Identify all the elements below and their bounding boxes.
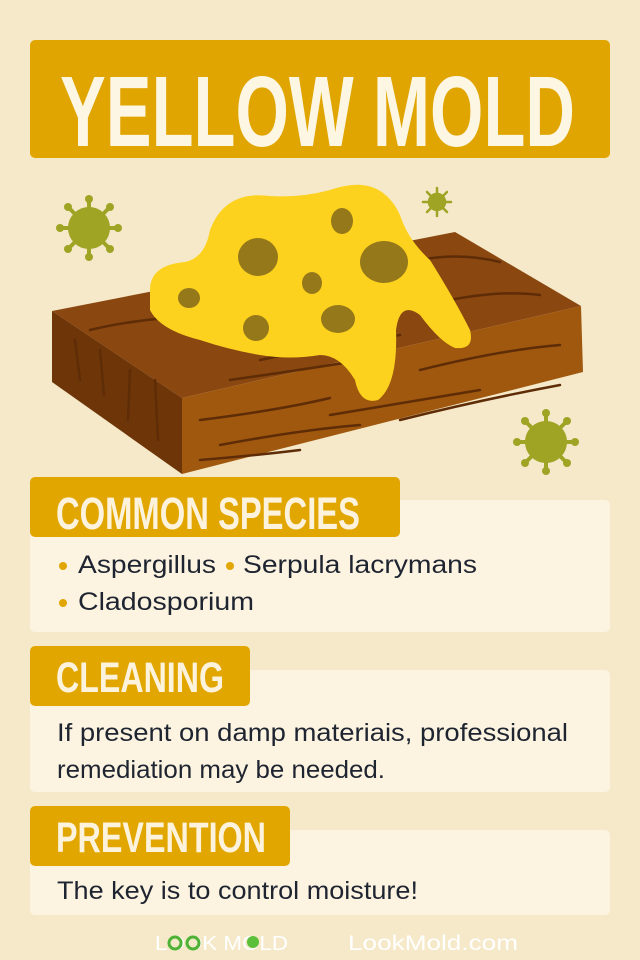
- cleaning text: remediation may be needed.: [57, 756, 385, 784]
- mold blob: [150, 185, 471, 401]
- panel: cleaning: [30, 646, 610, 792]
- heading: common species: [30, 477, 400, 539]
- species list: [59, 551, 477, 616]
- species list: Aspergillus: [78, 551, 216, 579]
- icon: spore right: [513, 409, 579, 475]
- wood board: [52, 232, 583, 474]
- panel: common species: [30, 477, 610, 632]
- heading: common species: COMMON SPECIES: [56, 488, 360, 539]
- heading: prevention: [30, 806, 290, 866]
- heading: cleaning: [30, 646, 250, 706]
- footer url: LookMold.com: [348, 932, 518, 955]
- panel: prevention: [30, 806, 610, 915]
- illustration: moldy wood board: [52, 185, 583, 475]
- heading: prevention: PREVENTION: [56, 814, 266, 862]
- species list: Serpula lacrymans: [243, 551, 477, 579]
- species list: Cladosporium: [78, 588, 254, 616]
- cleaning text: [57, 719, 568, 784]
- footer logo: LOOK MOLD: [155, 933, 288, 955]
- heading: cleaning: CLEANING: [56, 654, 224, 702]
- prevention text: The key is to control moisture!: [57, 877, 418, 905]
- icon: spore left: [56, 195, 122, 261]
- icon: spore small: [423, 188, 451, 216]
- cleaning text: If present on damp materiais, professional: [57, 719, 568, 747]
